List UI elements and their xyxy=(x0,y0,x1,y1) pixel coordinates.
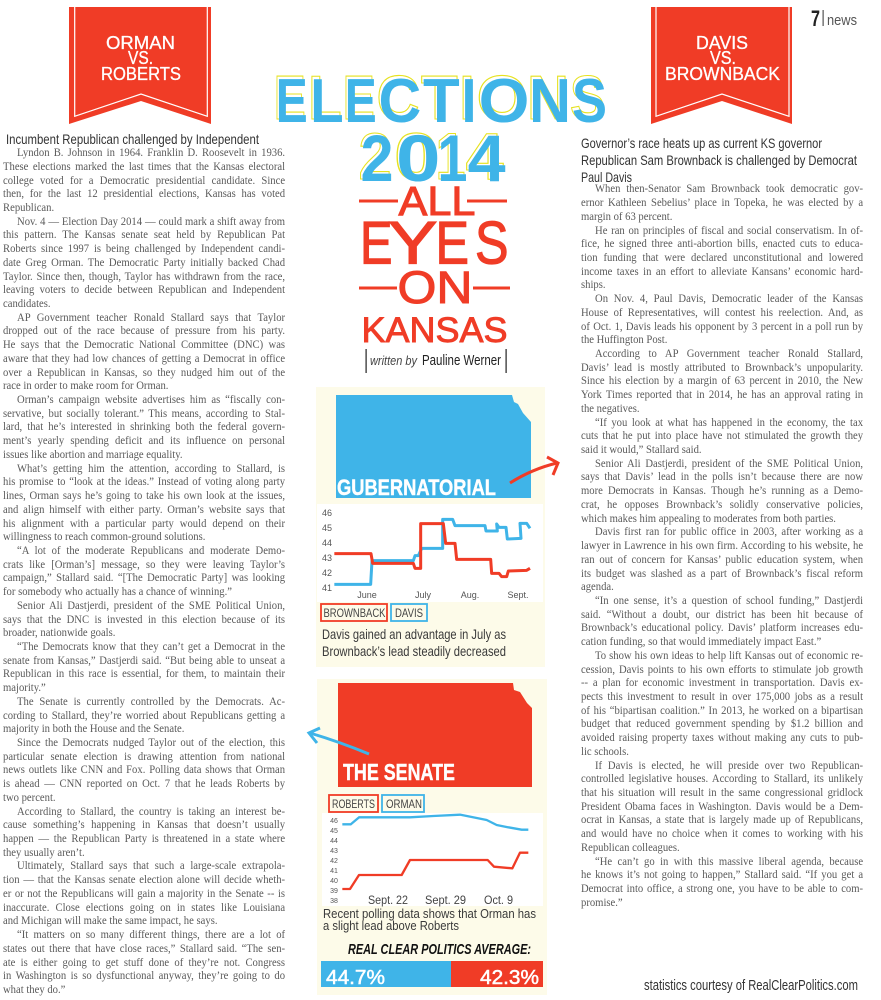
article text: right column: ocrat in Kansas, a state that is largely made up of Republicans, xyxy=(581,814,863,826)
article text: left column: “A lot of the moderate Republicans and moderate Demo- xyxy=(17,545,285,557)
title: 2014 xyxy=(358,119,506,195)
article text: right column: Since his election by a margin of 63 percent in 2010, the New xyxy=(581,375,863,387)
line chart: Roberts vs. Orman: 43 xyxy=(330,848,338,855)
article text: right column: says that Davis’ lead in the polls isn’t because there are now xyxy=(581,471,863,483)
article text: right column: which makes him appealing to moderates from both parties. xyxy=(581,513,836,525)
caption: senate: a slight lead above Roberts xyxy=(323,918,459,933)
line chart: Roberts vs. Orman: Sept. 22 xyxy=(368,893,408,907)
article text: right column: -- a plan for economic investment in transportation. Davis ex- xyxy=(581,677,863,689)
caption: senate: Recent polling data shows that Orman has xyxy=(323,906,536,921)
article text: left column: for somebody who actually has a chance of winning.” xyxy=(3,586,232,598)
caption: gubernatorial: Davis gained an advantage in July as xyxy=(322,626,506,642)
line chart: Roberts vs. Orman xyxy=(322,813,543,907)
title: Elections: E xyxy=(276,67,308,136)
title: Eyes: E xyxy=(436,210,469,276)
banner: Orman vs. Roberts: ROBERTS xyxy=(101,64,181,84)
line chart: Brownback vs. Davis: 42 xyxy=(322,568,332,578)
article text: right column: agenda. xyxy=(581,581,614,593)
article text: right column: that his situation will result in the same congressional gridlock xyxy=(581,787,863,799)
article text: right column: more Democrats in Kansas. Though he’s running as a Demo- xyxy=(581,485,863,497)
line chart: Roberts vs. Orman: 45 xyxy=(330,828,338,835)
map: Kansas, red xyxy=(338,683,532,787)
subhead: right column: Governor’s race heats up as current KS governor xyxy=(581,135,822,151)
article text: left column: particular senate election is drawing attention from national xyxy=(3,751,285,763)
panel: the senate xyxy=(309,679,547,995)
article text: left column: states out there that have close races,” Stallard said. “The sen- xyxy=(3,943,285,955)
article text: right column: said. “Without a doubt, our district has been hit because of xyxy=(581,609,863,621)
article text: left column: These elections marked the last times that the Kansas electoral xyxy=(3,161,285,173)
article text: left column: says that the DNC is invested in this election because of its xyxy=(3,614,285,626)
title: Elections xyxy=(274,64,607,136)
article text: right column: lic schools. xyxy=(581,746,629,758)
article text: left column: willingness to reach common-ground solutions. xyxy=(3,531,205,543)
article text: left column: ate is either going to get stuff done of they’re not. Congress xyxy=(3,956,285,968)
banner: Davis vs. Brownback: BROWNBACK xyxy=(665,64,780,84)
article text: left column: they usually aren’t. xyxy=(3,847,85,859)
article text: left column: Since the Democrats nudged Taylor out of the election, this xyxy=(17,737,285,749)
article text: right column: ships. xyxy=(581,279,606,291)
map: Kansas, blue xyxy=(336,395,531,498)
banner: Davis vs. Brownback: DAVIS xyxy=(696,33,748,53)
title: Elections: S xyxy=(570,64,605,133)
line chart: Brownback vs. Davis: 43 xyxy=(322,553,332,563)
article text: left column: Republican in this race is essential, for them, to maintain their xyxy=(3,668,285,680)
title: Elections: E xyxy=(274,64,306,133)
title: Kansas: KANSAS xyxy=(362,311,508,350)
article text: left column: two percent. xyxy=(3,792,56,804)
banner: Orman vs. Roberts: VS. xyxy=(128,48,153,68)
legend: Brownback: BROWNBACK xyxy=(324,606,386,620)
title: 2014: 4 xyxy=(468,121,506,195)
article text: left column: servative, but socially tolerant.” This means, according to Stal- xyxy=(3,408,285,420)
title: Eyes: S xyxy=(475,210,508,276)
article text: right column: avoided raising property taxes without making any cuts to pub- xyxy=(581,732,863,744)
title: Elections: O xyxy=(477,64,527,133)
article text: right column: President Obama faces in Washington. Davis would be a Dem- xyxy=(581,801,863,813)
banner: Orman vs. Roberts: ORMAN xyxy=(106,33,175,53)
article text: left column: leaving voters to decide between Republican and Independent xyxy=(3,284,285,296)
article text: right column: cession, Davis points to his own efforts to stimulate job growth xyxy=(581,664,863,676)
article text: right column: budget that reduced government spending by $1.2 billion and xyxy=(581,718,863,730)
arrow: blue, pointing left xyxy=(309,728,369,754)
line chart: Brownback vs. Davis: 41 xyxy=(322,583,332,593)
title: All xyxy=(359,178,507,224)
byline xyxy=(366,349,507,373)
title: Elections: C xyxy=(378,67,421,136)
map label: Gubernatorial: GUBERNATORIAL xyxy=(337,475,496,500)
article text: right column: crat, he opposes Brownback’s solidly conservative policies, xyxy=(581,499,863,511)
article text: left column: his alignment with a particular party would depend on their xyxy=(3,518,285,530)
bar: polling average: 44.7% xyxy=(326,967,385,989)
line chart: Roberts vs. Orman: Sept. 29 xyxy=(425,893,466,907)
article text: left column: Republican. xyxy=(3,202,54,214)
subhead: right column: Paul Davis xyxy=(581,169,632,185)
article text: right column: ran out of concern for Kansas’ public education system, when xyxy=(581,554,863,566)
article text: right column: He ran on principles of fiscal and social conservatism. In of- xyxy=(595,225,863,237)
title: Elections: T xyxy=(421,64,458,133)
article text: left column: majority.” xyxy=(3,682,46,694)
article text: right column: cation funding, so that would immediately impact East.” xyxy=(581,636,821,648)
article text: left column: senate from Kansas,” Dastjerdi said. “But being able to unseat a xyxy=(3,655,285,667)
article text: right column xyxy=(581,183,864,909)
article text: right column: York Times reported that in 2014, he has an approval rating in xyxy=(581,389,863,401)
line chart: Roberts vs. Orman: 46 xyxy=(330,818,338,825)
page number: 7 news: 7 xyxy=(811,6,820,31)
legend: Roberts: ROBERTS xyxy=(332,797,375,811)
line chart: Roberts vs. Orman: 38 xyxy=(330,898,338,905)
article text: left column: happen — the Republican Party is threatened in a state where xyxy=(3,833,285,845)
article text: left column: Nov. 4 — Election Day 2014 — could mark a shift away from xyxy=(17,216,285,228)
article text: left column: lard, that he’s interested in shrinking both the federal govern- xyxy=(3,421,285,433)
article text: left column: this pattern. The Kansas senate seat held by Republican Pat xyxy=(3,229,285,241)
article text: left column: Roberts since 1997 is being challenged by Independent candi- xyxy=(3,243,285,255)
article text: left column: issues like abortion and marriage equality. xyxy=(3,449,183,461)
article text: left column: college voted for a Democratic presidential candidate. Since xyxy=(3,175,285,187)
article text: left column: Ultimately, Stallard says that such a large-scale extrapola- xyxy=(17,860,285,872)
subhead: right column xyxy=(581,135,857,185)
article text: right column: Democrat into office, a strong one, you have to be able to com- xyxy=(581,883,863,895)
line chart: Roberts vs. Orman: 39 xyxy=(330,888,338,895)
article text: left column: tion — that the Kansas senate election alone will decide wheth- xyxy=(3,874,285,886)
article text: right column: lawyer in Lawrence in his own firm. According to his website, he xyxy=(581,540,863,552)
bar: polling average xyxy=(321,961,543,989)
article text: left column: candidates. xyxy=(3,298,51,310)
article text: right column: controlled legislative houses. According to Stallard, its unlikely xyxy=(581,773,863,785)
article text: right column: If Davis is elected, he will preside over two Republican- xyxy=(595,760,863,772)
article text: right column: When then-Senator Sam Brownback took democratic gov- xyxy=(595,183,863,195)
legend: Davis: DAVIS xyxy=(395,606,423,620)
article text: left column: The Senate is currently controlled by the Democrats. Ac- xyxy=(17,696,285,708)
caption: senate xyxy=(323,906,536,933)
article text: left column: in Washington is so dysfunctional anyway, they’re going to do xyxy=(3,970,285,982)
article text: right column: promise.” xyxy=(581,897,623,909)
title: Eyes: E xyxy=(360,210,392,276)
article text: right column: its budget was slashed as a part of Brownback’s fiscal reform xyxy=(581,568,863,580)
title: Elections: E xyxy=(345,67,377,136)
article text: right column: said it would,” Stallard said. xyxy=(581,444,702,456)
article text: right column: “If you look at what has happened in the economy, the tax xyxy=(595,417,863,429)
legend: Davis xyxy=(391,604,427,621)
title: Elections: N xyxy=(529,67,571,136)
article text: left column: Senior Ali Dastjerdi, president of the SME Political Union, xyxy=(17,600,285,612)
line chart: Roberts vs. Orman: Oct. 9 xyxy=(484,893,513,907)
title: Eyes xyxy=(360,210,508,276)
article text: right column: pects this investment to result in over 175,000 jobs as a result xyxy=(581,691,863,703)
line chart: Roberts vs. Orman: 42 xyxy=(330,858,338,865)
title: Eyes: Y xyxy=(388,210,438,276)
article text: right column: To show his own ideas to help lift Kansas out of economic re- xyxy=(595,650,863,662)
legend: Brownback xyxy=(321,604,387,621)
title: On xyxy=(359,262,510,313)
legend: Orman: ORMAN xyxy=(386,797,422,811)
article text: right column: fice, he signed three anti-abortion bills, enacted cuts to educa- xyxy=(581,238,863,250)
line chart: Brownback vs. Davis: Aug. xyxy=(461,590,479,600)
article text: right column: ernor Kathleen Sebelius’ place in Topeka, he was elected by a xyxy=(581,197,863,209)
title: 2014: 4 xyxy=(466,119,504,193)
article text: right column: tion funding that were declared unconstitutional and lowered xyxy=(581,252,863,264)
byline: Pauline Werner xyxy=(422,352,501,369)
article text: left column xyxy=(3,147,286,996)
subhead: left column: Incumbent Republican challenged by Independent xyxy=(6,131,259,147)
bar: polling average: 42.3% xyxy=(480,967,539,989)
article text: left column: and Michigan will make the same impact, he says. xyxy=(3,915,217,927)
article text: left column: date Greg Orman. The Democratic Party initially backed Chad xyxy=(3,257,285,269)
title: 2014: 1 xyxy=(436,119,466,193)
article text: left column: aware that they had low chances of getting a Democrat in office xyxy=(3,353,285,365)
line chart: Brownback vs. Davis: 46 xyxy=(322,508,332,518)
article text: left column: broader, nationwide goals. xyxy=(3,627,115,639)
article text: right column: Davis’ lead is mostly attributed to Brownback’s unpopularity. xyxy=(581,362,863,374)
banner: Davis vs. Brownback xyxy=(651,7,792,124)
article text: right column: On Nov. 4, Paul Davis, Democratic leader of the Kansas xyxy=(595,293,863,305)
article text: left column: Lyndon B. Johnson in 1964. Franklin D. Roosevelt in 1936. xyxy=(17,147,285,159)
article text: right column: Republican colleagues. xyxy=(581,842,680,854)
title: All: ALL xyxy=(398,178,476,224)
article text: right column: Davis first ran for public office in 2003, after working as a xyxy=(595,526,863,538)
title: Elections: S xyxy=(572,67,607,136)
line chart: Roberts vs. Orman: 44 xyxy=(330,838,338,845)
title: 2014: 1 xyxy=(438,121,468,195)
article text: left column: race in order to make room for Orman. xyxy=(3,380,168,392)
article text: left column: ment’s yearly spending deficit and its influence on personal xyxy=(3,435,285,447)
article text: left column: What’s getting him the attention, according to Stallard, is xyxy=(17,463,285,475)
article text: left column: er or not the Republicans will gain a majority in the Senate -- is xyxy=(3,888,285,900)
article text: left column: “It matters on so many different things, there are a lot of xyxy=(17,929,285,941)
article text: right column: income taxes in an effort to alleviate Kansans’ economic hard- xyxy=(581,266,863,278)
article text: left column: majority in both the House and the Senate. xyxy=(3,723,184,735)
article text: left column: AP Government teacher Ronald Stallard says that Taylor xyxy=(17,312,285,324)
article text: left column: then, for the last 12 presidential elections, Kansas has voted xyxy=(3,188,285,200)
article text: right column: and would have no choice when it comes to working with his xyxy=(581,828,863,840)
article text: left column: Orman’s campaign website advertises him as “fiscally con- xyxy=(17,394,285,406)
line chart: Brownback vs. Davis: Sept. xyxy=(507,590,529,600)
article text: left column: inaccurate. Close elections going on in states like Louisiana xyxy=(3,902,285,914)
title: Elections: I xyxy=(460,64,474,133)
article text: left column: dropped out of the race because of pressure from his party. xyxy=(3,325,285,337)
article text: left column: crats like [Orman’s] message, so they were leaving Taylor’s xyxy=(3,559,285,571)
line chart: Roberts vs. Orman: 41 xyxy=(330,868,338,875)
line chart: Brownback vs. Davis: June xyxy=(357,590,377,600)
title: Elections: N xyxy=(527,64,569,133)
line chart: Brownback vs. Davis: 45 xyxy=(322,523,332,533)
caption: gubernatorial: Brownback’s lead steadily decreased xyxy=(322,643,506,659)
title: Elections: I xyxy=(462,67,476,136)
article text: right column: margin of 63 percent. xyxy=(581,211,672,223)
article text: left column: is ahead — CNN reported on Oct. 7 that he leads Roberts by xyxy=(3,778,285,790)
article text: right column: cuts that he put into place have not stimulated the growth they xyxy=(581,430,863,442)
article text: right column: According to AP Government teacher Ronald Stallard, xyxy=(595,348,863,360)
legend: Orman xyxy=(382,795,424,812)
article text: right column: Senior Ali Dastjerdi, president of the SME Political Union, xyxy=(595,458,863,470)
banner: Orman vs. Roberts xyxy=(69,7,211,124)
title: Elections: T xyxy=(423,67,460,136)
article text: right column: House of Representatives, will contest his reelection. And, as xyxy=(581,307,863,319)
map label: The Senate: THE SENATE xyxy=(343,759,455,785)
title: 2014: 0 xyxy=(396,121,440,195)
article text: left column: his promise to “look at the ideas.” Instead of voting along party xyxy=(3,476,285,488)
page number: 7 news: news xyxy=(827,12,857,29)
title: 2014: 0 xyxy=(394,119,438,193)
article text: right column: of Oct. 1, Davis leads his opponent by 3 percent in a poll run by xyxy=(581,321,863,333)
legend: Roberts xyxy=(329,795,378,812)
article text: left column: According to Stallard, the country is taking an interest be- xyxy=(17,806,285,818)
article text: left column: campaign,” Stallard said. “[The Democratic Party] was looking xyxy=(3,572,285,584)
banner: Davis vs. Brownback: VS. xyxy=(710,48,736,68)
title: 2014: 2 xyxy=(358,119,392,193)
byline: written by xyxy=(370,353,418,368)
caption: gubernatorial xyxy=(322,626,506,659)
article text: right column: “In one sense, it’s a question of school funding,” Dastjerdi xyxy=(595,595,863,607)
heading: Real Clear Politics average: REAL CLEAR POLITICS AVERAGE: xyxy=(348,941,531,958)
article text: right column: the negatives. xyxy=(581,403,640,415)
title: Elections: C xyxy=(376,64,419,133)
line chart: Brownback vs. Davis: 44 xyxy=(322,538,332,548)
article text: left column: Taylor. Since then, though, Taylor has withdrawn from the race, xyxy=(3,271,285,283)
article text: right column: the Huffington Post. xyxy=(581,334,667,346)
article text: right column: Brownback’s educational policy. Davis’ platform increases edu- xyxy=(581,622,863,634)
article text: right column: he knows it’s not going to happen,” Stallard said. “If you get a xyxy=(581,869,863,881)
line chart: Brownback vs. Davis xyxy=(317,504,543,602)
article text: left column: and align himself with either party. Orman’s website says that xyxy=(3,504,285,516)
article text: left column: lines, Orman says he’s going to take his own look at the issues, xyxy=(3,490,285,502)
article text: left column: He says that the Democratic National Committee (DNC) was xyxy=(3,339,285,351)
article text: left column: what they do.” xyxy=(3,984,65,996)
page number: 7 news xyxy=(811,6,857,31)
article text: right column: “He can’t go in with this massive liberal agenda, because xyxy=(595,856,863,868)
title: On: ON xyxy=(398,262,472,313)
title: Elections: L xyxy=(310,67,344,136)
title: 2014: 2 xyxy=(360,121,394,195)
line chart: Brownback vs. Davis: July xyxy=(415,590,431,600)
article text: left column: cause something’s happening in Kansas that doesn’t usually xyxy=(3,819,285,831)
title: Elections: L xyxy=(308,64,342,133)
panel: gubernatorial xyxy=(316,387,558,667)
article text: left column: over a Republican in Kansas, so they nudged him out of the xyxy=(3,367,285,379)
article text: left column: “The Democrats know that they can’t get a Democrat in the xyxy=(17,641,285,653)
title: Elections: O xyxy=(479,67,529,136)
title: Elections: E xyxy=(343,64,375,133)
article text: left column: cording to Stallard, they’re worried about Republicans getting a xyxy=(3,710,285,722)
arrow: red, pointing right xyxy=(510,457,558,483)
article text: left column: news outlets like CNN and Fox. Polling data shows that Orman xyxy=(3,764,285,776)
line chart: Roberts vs. Orman: 40 xyxy=(330,878,338,885)
article text: right column: of his “bipartisan coalition.” In 2013, he worked on a bipartisan xyxy=(581,705,863,717)
